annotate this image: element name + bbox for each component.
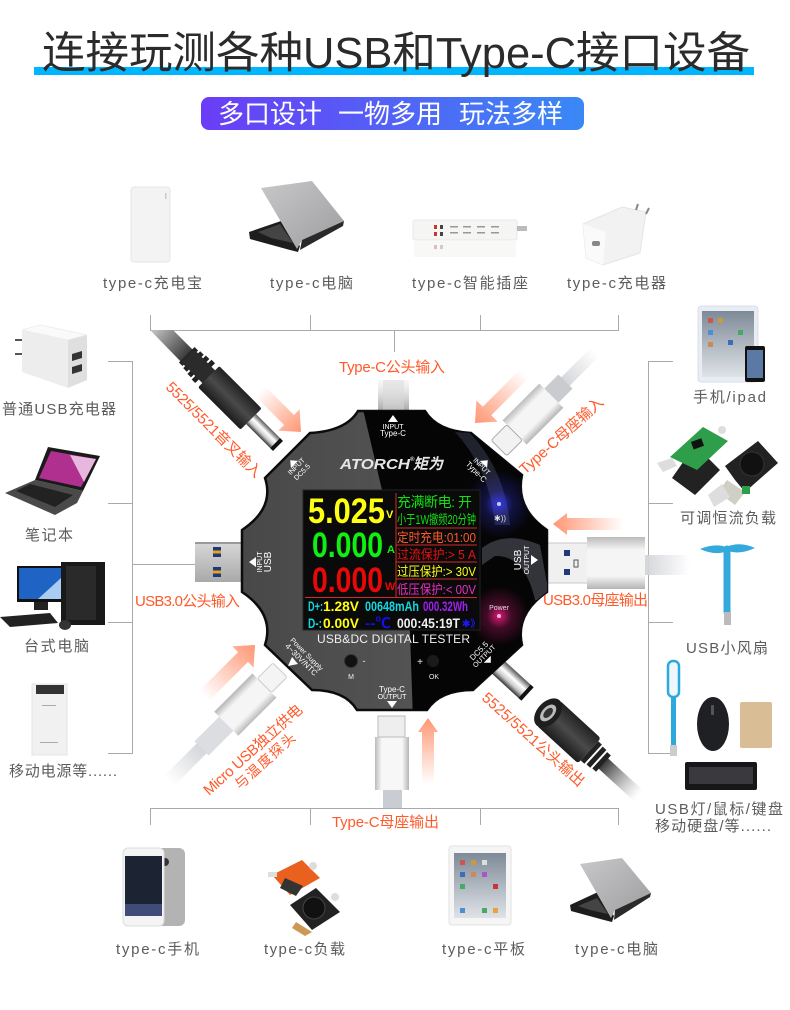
reading: power: 0.000: [312, 561, 383, 600]
port label: input usb: INPUT: [257, 551, 264, 572]
port label: output dc5.5: OUTPUT: [472, 644, 498, 669]
data row 2: 000:45:19T: [397, 615, 460, 631]
connector: usb3 female output: [547, 537, 690, 589]
icon: hard disk: [740, 702, 772, 748]
arrow: usb output: [553, 513, 623, 535]
brand: ®: [410, 456, 415, 463]
icon: ipad and phone: [698, 306, 765, 382]
icon: mobile power: [32, 684, 67, 755]
indicator: blue led: [497, 502, 501, 506]
icon: type-c laptop lower: [570, 858, 651, 922]
port triangle: power supply: [288, 657, 298, 666]
button: M: -: [362, 656, 366, 666]
reading: current: A: [387, 544, 395, 556]
power label: Power: [489, 605, 510, 612]
settings list: 定时充电:01:00: [397, 530, 476, 545]
button: M: [344, 654, 366, 681]
reading: power: W: [385, 581, 396, 593]
icon: notebook: [5, 447, 100, 515]
label: type-c power bank: type-c充电宝: [103, 275, 202, 292]
label: usb3 male input: USB3.0公头输入: [135, 593, 240, 610]
port label: output usb: [513, 545, 538, 574]
label: type-c load: type-c负载: [264, 941, 345, 958]
icon: USB wall charger: [15, 325, 87, 388]
data row 1: [308, 598, 468, 614]
model name: USB&DC DIGITAL TESTER: [317, 632, 470, 646]
port label: input type-c right: Type-C: [464, 460, 489, 484]
icon: smart power strip: [413, 220, 527, 257]
port label: output type-c bottom: OUTPUT: [378, 694, 407, 701]
reading: current: 0.000: [312, 526, 383, 565]
icon: usb fan: [700, 544, 755, 625]
arrow: top-left input: [249, 380, 312, 443]
connector: type-c output: [375, 716, 409, 808]
port label: power supply: 4~30V/NTC: [283, 642, 319, 678]
icon: adjustable load: [657, 426, 778, 507]
port label: output type-c bottom: [378, 685, 407, 708]
right column devices: [655, 306, 783, 835]
port label: input type-c top: INPUT: [382, 424, 404, 431]
title: 连接玩测各种USB和Type-C接口设备: [42, 30, 750, 78]
connector: type-c top: [378, 380, 409, 410]
label: type-c male input: Type-C公头输入: [339, 359, 445, 376]
label: type-c tablet: type-c平板: [442, 940, 525, 958]
settings list: 充满断电: 开: [397, 494, 472, 510]
device body: [242, 411, 547, 710]
label: type-c phone: type-c手机: [116, 941, 199, 958]
indicator: power led: [497, 614, 501, 618]
button: OK: +: [417, 657, 423, 668]
subtitle pill: 一物多用: [338, 99, 442, 129]
data row 2: 0.00V: [323, 615, 360, 631]
data row 2: [308, 615, 480, 631]
label: type-c charger: type-c充电器: [567, 275, 666, 292]
port label: power supply: Power Supply: [288, 637, 324, 673]
subtitle pill: [201, 97, 584, 130]
left column devices: [0, 325, 117, 780]
data row 2: --℃: [365, 615, 391, 631]
arrow: top-right input: [464, 363, 535, 434]
connector: dc5525 output jack: [487, 654, 650, 808]
subtitle pill: 多口设计: [218, 99, 322, 129]
label: desktop pc: 台式电脑: [24, 638, 89, 655]
top row devices: [103, 181, 666, 292]
port label: output usb: OUTPUT: [524, 545, 531, 574]
label: usb fan: USB小风扇: [686, 640, 768, 657]
label: mobile hard disk: 移动硬盘/等......: [655, 817, 771, 835]
settings list: 过流保护:> 5 A: [397, 547, 476, 562]
icon: type-c power bank: [131, 187, 170, 262]
brand: ATORCH: [339, 456, 411, 473]
label: usb accessories: USB灯/鼠标/键盘: [655, 800, 783, 818]
screen: [303, 490, 480, 631]
bottom row devices: [116, 846, 658, 958]
button: M: M: [348, 674, 354, 681]
port label: input type-c top: [380, 415, 406, 438]
settings list: 过压保护:> 30V: [397, 564, 476, 579]
settings list: 低压保护:< 00V: [397, 582, 476, 597]
data row 1: 000.32Wh: [423, 598, 468, 614]
port label: input dc5.5: INPUT: [287, 457, 307, 477]
connector: dc5525 input plug: [150, 330, 289, 457]
arrow: micro usb input: [193, 634, 266, 707]
port label: output dc5.5: [466, 637, 501, 673]
connector: usb3 male left: [195, 542, 242, 582]
label: temperature probe: 与温度探头: [231, 729, 298, 792]
label: adjustable load: 可调恒流负载: [680, 510, 776, 527]
label: USB charger: 普通USB充电器: [2, 401, 116, 418]
bluetooth mark: ✱)): [494, 514, 506, 523]
connector: micro usb input: [157, 658, 292, 793]
data row 1: 1.28V: [323, 598, 360, 614]
label: dc tuning fork input: 5525/5521音叉输入: [162, 379, 265, 481]
port label: input dc5.5: DC5.5: [293, 463, 312, 482]
brand: 矩为: [413, 456, 445, 473]
port label: input type-c right: INPUT: [471, 457, 491, 477]
data row 2: D-:: [308, 615, 322, 631]
label: notebook: 笔记本: [25, 527, 73, 544]
port label: output type-c bottom: Type-C: [379, 685, 405, 694]
label: micro usb power: Micro USB独立供电: [200, 701, 306, 799]
icon: type-c load: [268, 860, 340, 936]
icon: keyboard: [685, 762, 757, 790]
data row 1: 00648mAh: [365, 598, 419, 614]
label: type-c laptop lower: type-c电脑: [575, 941, 658, 958]
port label: input type-c right: [464, 451, 497, 484]
connector: type-c female input: [487, 340, 607, 460]
subtitle pill: 玩法多样: [459, 99, 563, 129]
brand: [339, 456, 445, 473]
screen dividers: [305, 493, 477, 598]
port label: input dc5.5: [283, 452, 313, 482]
connector brackets: [108, 315, 673, 825]
data row 2: ✱》: [462, 618, 480, 630]
icon: type-c laptop: [249, 181, 344, 252]
label: type-c female input: Type-C母座输入: [516, 394, 607, 478]
label: mobile power: 移动电源等......: [9, 762, 117, 780]
button: OK: OK: [429, 674, 439, 681]
button: OK: [417, 655, 439, 681]
port label: input type-c top: Type-C: [380, 429, 406, 438]
arrow: type-c output: [418, 718, 438, 784]
settings list: 小于1W撤频20分钟: [397, 512, 476, 527]
port label: input usb: USB: [263, 551, 274, 572]
device gloss: [364, 412, 547, 709]
icon: desktop pc: [0, 562, 105, 630]
icon: type-c phone: [123, 848, 185, 926]
port label: output usb: USB: [513, 549, 524, 570]
reading: voltage: V: [386, 509, 394, 521]
title band: [34, 67, 754, 75]
reading: voltage: 5.025: [308, 492, 385, 531]
label: type-c smart strip: type-c智能插座: [412, 274, 528, 292]
label: type-c female output: Type-C母座输出: [332, 814, 439, 831]
icon: type-c tablet: [449, 846, 511, 925]
label: dc male output: 5525/5521公头输出: [478, 689, 588, 790]
tester device: [242, 405, 560, 720]
port label: input usb: [249, 551, 274, 572]
icon: usb lamp: [668, 661, 679, 756]
label: usb3 female output: USB3.0母座输出: [543, 592, 648, 609]
data row 1: D+:: [308, 598, 323, 614]
port label: output dc5.5: DC5.5: [468, 640, 491, 662]
icon: type-c charger: [583, 204, 649, 265]
settings list: [397, 494, 476, 597]
icon: mouse: [697, 697, 729, 751]
label: type-c laptop: type-c电脑: [270, 275, 353, 292]
label: phone and ipad: 手机/ipad: [693, 389, 766, 406]
